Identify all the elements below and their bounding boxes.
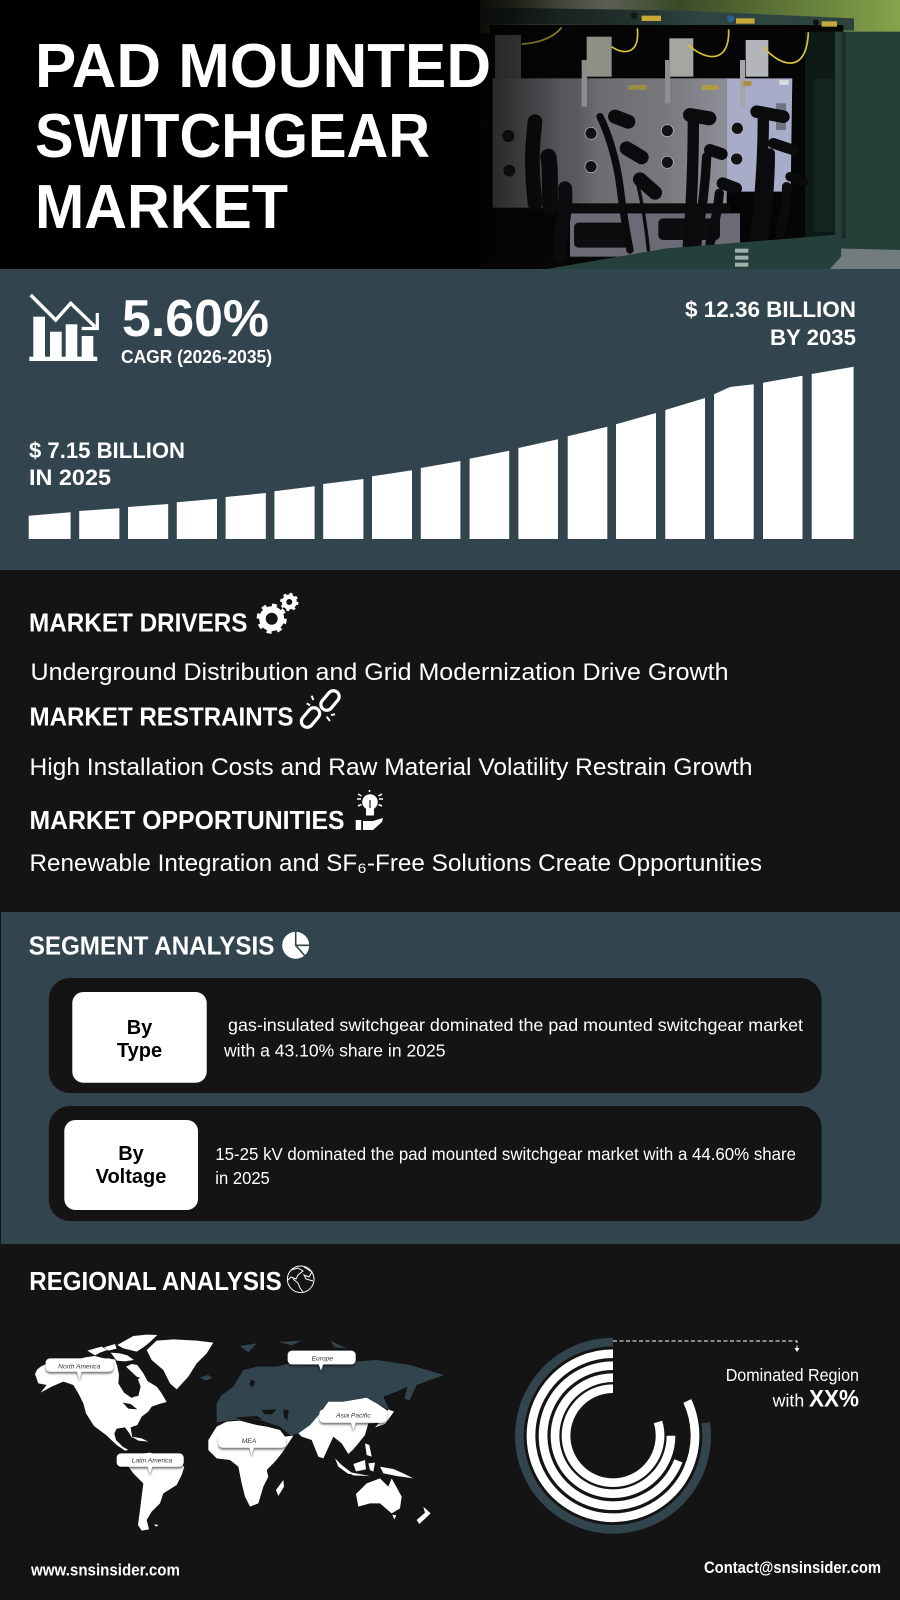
callout: Europe [288,1351,356,1371]
callout: Asia Pacific [319,1409,387,1430]
card: by voltage [49,1106,822,1221]
card: by voltage: 15-25 kV dominated the pad mounted switchgear market with a 44.60% share [215,1144,796,1164]
CAGR value: 5.60% [122,290,269,348]
title: SWITCHGEAR [35,102,430,171]
panel: market size [0,269,900,570]
forecast value: $ 12.36 BILLION [685,297,856,322]
dominated region label: XX% [809,1386,859,1413]
callout: Asia Pacific: Asia Pacific [335,1413,371,1420]
callout: MEA [218,1435,286,1455]
footer: website: www.snsinsider.com [30,1561,180,1580]
text: restraints: High Installation Costs and Raw Material Volatility Restrain Growth [30,754,752,781]
radial chart: dominated region [519,1342,707,1529]
map: europe and northern asia [200,1341,444,1435]
world map [35,1335,444,1531]
heading: regional analysis: REGIONAL ANALYSIS [29,1266,282,1296]
photo: switchgear cabinet [480,0,900,269]
upper boxes [495,35,521,78]
icon: globe [287,1266,314,1293]
card: by type [49,978,822,1093]
lower cabinet door edge [547,233,842,269]
card: by type: By [127,1017,153,1039]
bushings [502,122,743,177]
icon: gears [258,594,297,632]
heading: segment analysis: SEGMENT ANALYSIS [29,930,274,960]
panel hardware [582,60,789,130]
text: drivers: Underground Distribution and Grid Modernization Drive Growth [30,659,728,686]
map: inland seas [121,1379,289,1421]
icon: chart with falling arrow [29,295,97,361]
forecast value: BY 2035 [770,325,856,350]
heading: market opportunities: MARKET OPPORTUNITIES [30,805,344,835]
card: by type: Type [117,1040,162,1062]
panel: segment analysis [1,912,900,1244]
callout: North America: North America [58,1363,101,1370]
callout: Latin America [117,1453,184,1474]
cabinet label lights [642,16,837,27]
heading: market drivers: MARKET DRIVERS [29,608,248,638]
map callouts [46,1351,387,1474]
dominated region label: Dominated Region [726,1365,859,1385]
card: by type: gas-insulated switchgear dominated the pad mounted switchgear market [228,1015,803,1035]
base value: $ 7.15 BILLION [29,438,185,463]
dominated region label: with [772,1391,804,1411]
dominated region label [726,1365,859,1413]
switch panels [493,78,727,208]
CAGR label: CAGR (2026-2035) [121,347,272,367]
forecast value [685,297,856,350]
photo fade overlay [430,0,560,269]
callout: Europe: Europe [312,1355,333,1362]
panel: drivers, restraints, opportunities [29,594,762,877]
title [35,32,491,242]
heading: market restraints: MARKET RESTRAINTS [30,702,294,732]
card: by voltage: Voltage [96,1166,166,1188]
yellow cables [522,27,808,63]
map: americas, africa, asia pacific [35,1335,431,1531]
header panel [0,0,900,269]
card: by type: with a 43.10% share in 2025 [223,1041,446,1061]
panel: regional analysis [29,1266,859,1531]
title: PAD MOUNTED [35,32,491,101]
text: opportunities: Renewable Integration and SF₆-Free Solutions Create Opportunities [30,850,762,877]
callout: North America [46,1358,113,1379]
icon: bulb in hand [356,790,383,830]
card: by voltage: By [118,1143,145,1165]
dashed leader arrow [613,1341,800,1352]
bar chart: market growth [29,367,854,539]
base value [29,438,185,490]
icon: broken chain [299,688,342,730]
icon: pie chart [282,931,310,959]
callout: MEA: MEA [242,1438,257,1445]
base value: IN 2025 [29,465,111,490]
cable elbows [532,112,803,257]
card: by voltage: in 2025 [215,1168,270,1188]
title: MARKET [35,173,288,242]
callout: Latin America: Latin America [132,1458,173,1465]
